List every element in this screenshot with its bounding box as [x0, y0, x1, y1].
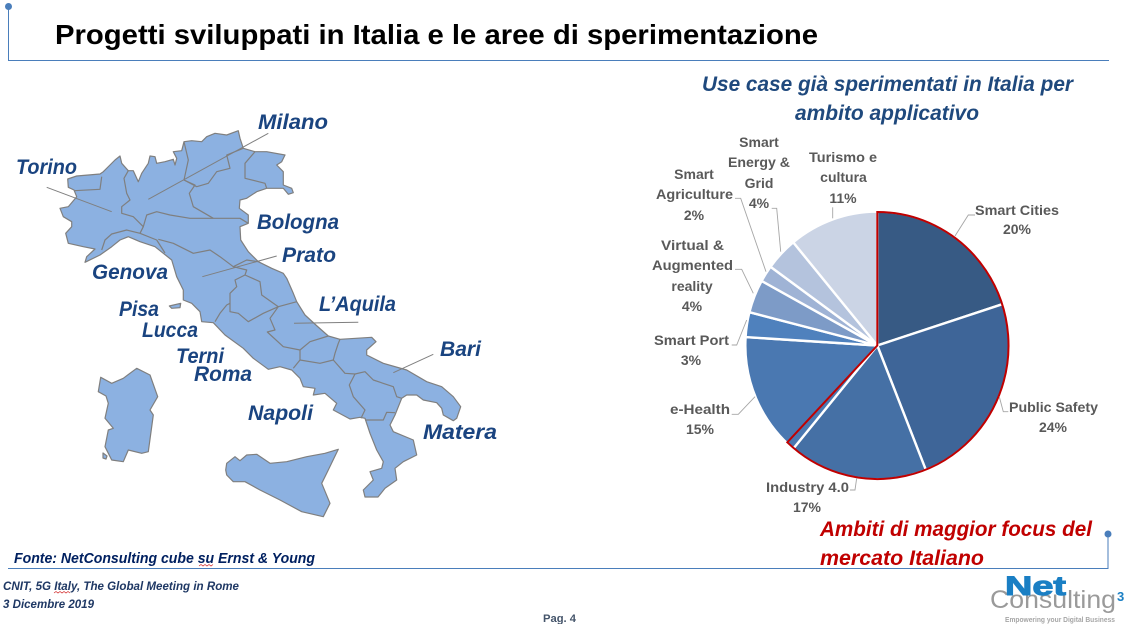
- source note: Fonte: NetConsulting cube su Ernst & Young: [14, 551, 315, 567]
- header rule with dot: [5, 3, 1109, 60]
- region borders: [74, 142, 402, 420]
- label: Virtual and Augmented reality: 4%: [682, 298, 703, 314]
- title: Progetti sviluppati in Italia e le aree di sperimentazione: [55, 19, 818, 50]
- slice: e-Health 15%: [745, 337, 877, 449]
- label: Virtual and Augmented reality: [652, 237, 733, 314]
- mainland Italy: [60, 131, 461, 497]
- slice: Smart Agriculture 2%: [762, 267, 877, 346]
- label: e-Health: e-Health: [670, 401, 730, 417]
- label: Smart Port: 3%: [681, 352, 702, 368]
- slice: Public Safety 24%: [877, 304, 1009, 470]
- red callout: Ambiti di maggior focus del: [819, 518, 1093, 541]
- city labels: Prato: [282, 244, 336, 267]
- city labels: Lucca: [142, 319, 198, 342]
- label: Turismo e cultura: [809, 149, 877, 206]
- chart title: Use case già sperimentati in Italia per: [702, 73, 1075, 96]
- map of Italy: [60, 131, 461, 517]
- logo: NetConsulting cube: Net: [1005, 571, 1066, 601]
- label: e-Health: 15%: [686, 421, 715, 437]
- slice: Smart Port 3%: [746, 312, 877, 346]
- label: Smart Port: Smart Port: [654, 332, 729, 348]
- pie chart: [745, 212, 1009, 479]
- city labels: Terni: [176, 345, 225, 368]
- small island: [103, 453, 107, 459]
- Sicily: [226, 449, 338, 517]
- event note: 3 Dicembre 2019: [3, 597, 94, 611]
- red focus outline: [787, 212, 1009, 479]
- event note: [3, 579, 239, 611]
- city labels: Napoli: [248, 402, 314, 425]
- city labels: Roma: [194, 363, 252, 386]
- label: Public Safety: Public Safety: [1009, 399, 1098, 415]
- label: Smart Port: [654, 332, 729, 368]
- city labels: Bologna: [257, 211, 339, 234]
- city labels: Bari: [440, 338, 482, 361]
- label: Smart Energy and Grid: Grid: [745, 175, 773, 191]
- label: Industry 4.0: Industry 4.0: [766, 479, 849, 495]
- slice: Smart Energy and Grid 4%: [770, 242, 877, 346]
- slice: Smart Cities 20%: [877, 212, 1003, 346]
- city labels: Matera: [423, 421, 497, 444]
- event note: CNIT, 5G Italy, The Global Meeting in Rome: [3, 579, 239, 593]
- chart title: [702, 73, 1075, 125]
- label: e-Health: [670, 401, 730, 437]
- logo: NetConsulting cube: Empowering your Digital Business: [1005, 615, 1115, 624]
- chart title: ambito applicativo: [795, 102, 979, 125]
- label: Turismo e cultura: cultura: [820, 169, 867, 185]
- city labels: Torino: [16, 156, 77, 179]
- label: Industry 4.0: 17%: [793, 499, 822, 515]
- Sardinia: [98, 368, 158, 462]
- city labels: Milano: [258, 111, 328, 134]
- pie leader lines: [732, 198, 1008, 490]
- label: Virtual and Augmented reality: reality: [671, 278, 713, 294]
- label: Industry 4.0: [766, 479, 849, 515]
- footer rule with dot: [8, 530, 1112, 568]
- label: Smart Agriculture: Smart: [674, 166, 714, 182]
- red callout: [819, 518, 1093, 570]
- slice: Virtual and Augmented reality 4%: [749, 281, 877, 346]
- label: Smart Cities: 20%: [1003, 221, 1032, 237]
- label: Public Safety: [1009, 399, 1098, 435]
- label: Smart Cities: [975, 202, 1059, 237]
- label: Smart Energy and Grid: 4%: [749, 195, 770, 211]
- pie labels: [652, 134, 1098, 515]
- city labels: Genova: [92, 261, 168, 284]
- label: Smart Agriculture: [656, 166, 733, 223]
- label: Public Safety: 24%: [1039, 419, 1068, 435]
- city labels: L’Aquila: [319, 293, 396, 316]
- label: Smart Cities: Smart Cities: [975, 202, 1059, 218]
- label: Smart Energy and Grid: Energy &: [728, 154, 790, 170]
- Elba: [169, 303, 181, 308]
- label: Turismo e cultura: 11%: [829, 190, 857, 206]
- city leader lines: [47, 133, 433, 373]
- logo: NetConsulting cube: Consulting: [990, 586, 1116, 614]
- slice: Industry 4.0 17%: [793, 346, 926, 479]
- label: Virtual and Augmented reality: Augmented: [652, 257, 733, 273]
- label: Smart Energy and Grid: Smart: [739, 134, 779, 150]
- red callout: mercato Italiano: [820, 547, 984, 570]
- label: Smart Energy and Grid: [728, 134, 790, 211]
- slice: Turismo e cultura 11%: [793, 212, 877, 346]
- city labels: [16, 111, 497, 444]
- label: Turismo e cultura: Turismo e: [809, 149, 877, 165]
- label: Virtual and Augmented reality: Virtual &: [661, 237, 724, 253]
- city labels: Pisa: [119, 298, 159, 321]
- logo: NetConsulting cube: [990, 571, 1124, 624]
- label: Smart Agriculture: Agriculture: [656, 186, 733, 202]
- logo: NetConsulting cube: 3: [1117, 589, 1124, 604]
- label: Smart Agriculture: 2%: [684, 207, 705, 223]
